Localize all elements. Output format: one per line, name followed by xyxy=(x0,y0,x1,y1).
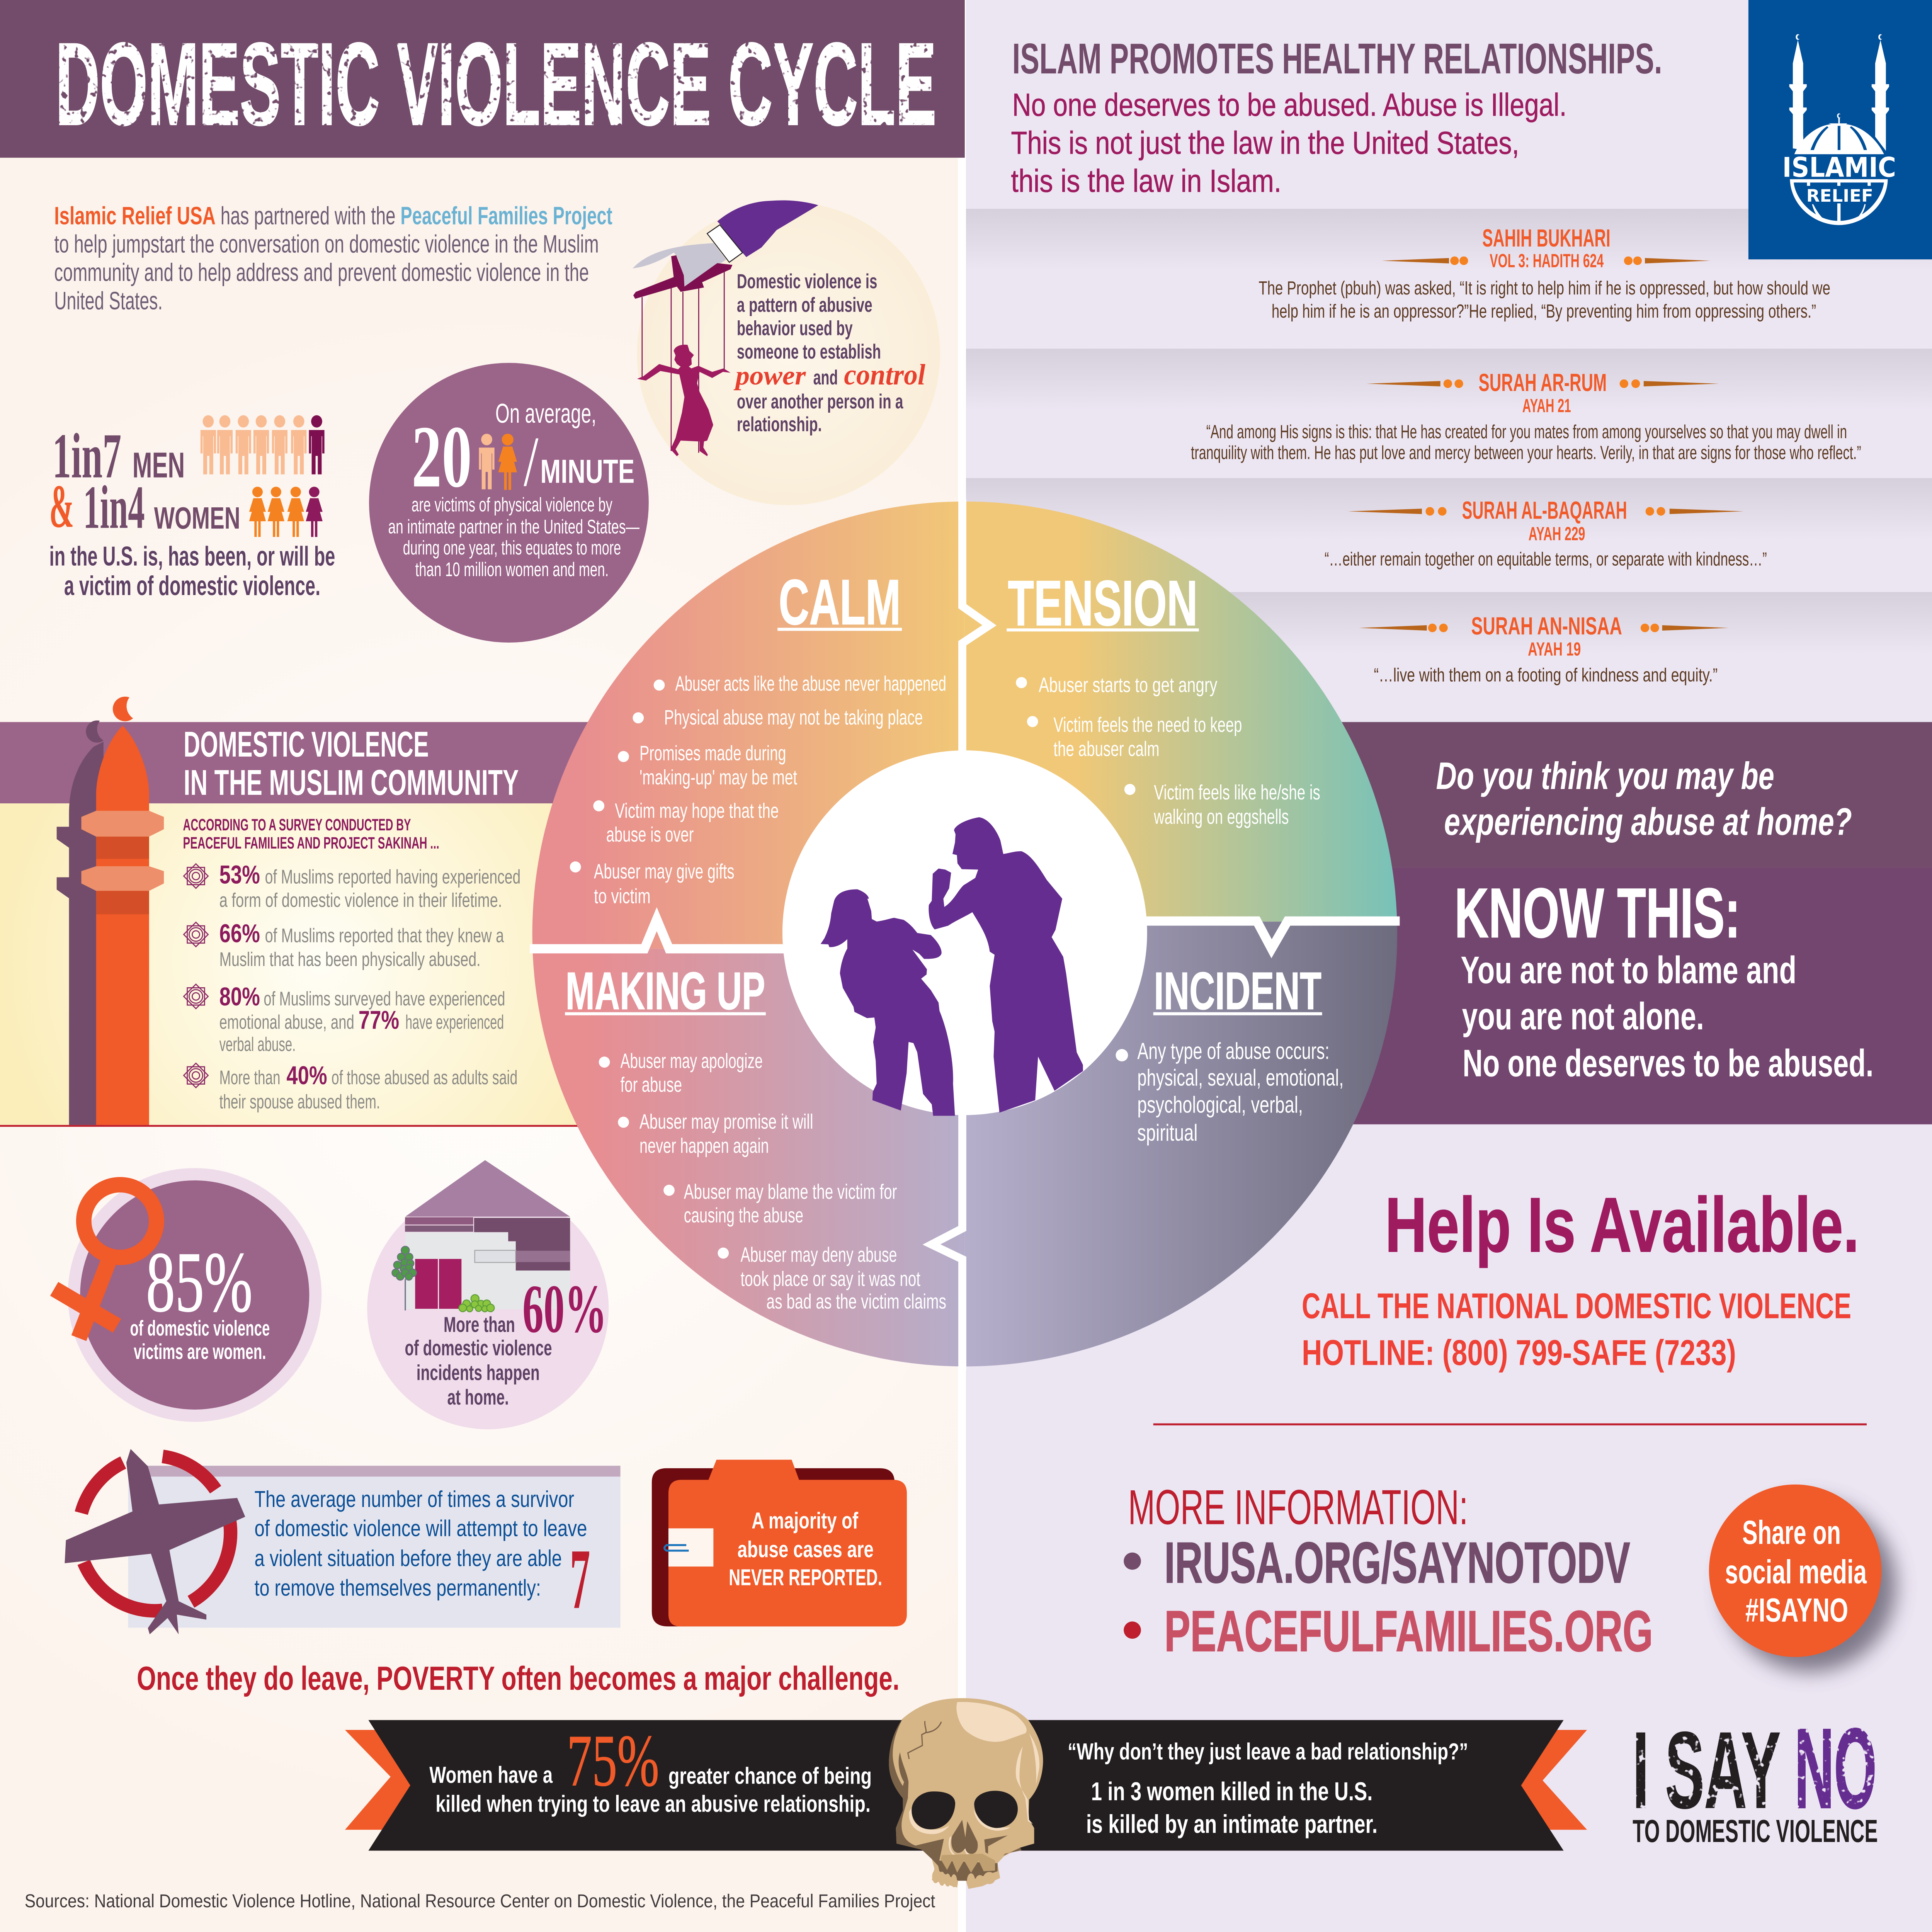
logo: Islamic Relief: ISLAMIC xyxy=(1782,151,1896,183)
segment: calm: Victim may hope that the xyxy=(615,799,779,823)
puppet definition text: control xyxy=(844,358,925,391)
know this heading: KNOW THIS: xyxy=(1454,873,1740,952)
statistic: 60 percent happen at home: 60% xyxy=(522,1270,607,1347)
text block: abuse is illegal: this is the law in Islam. xyxy=(1011,163,1281,199)
segment: incident: Any type of abuse occurs: xyxy=(1137,1037,1330,1064)
intro text block: Peaceful Families Project xyxy=(400,201,612,230)
statistic: 1 in 7 men and 1 in 4 women: & xyxy=(49,473,74,541)
question: Do you think you may be xyxy=(1436,755,1774,797)
survey note: ACCORDING TO A SURVEY CONDUCTED BY xyxy=(183,816,411,834)
callout: share on social media: Share on xyxy=(1742,1514,1841,1551)
survey statistics: a form of domestic violence in their lifetime. xyxy=(219,889,502,911)
title banner xyxy=(0,0,965,158)
panel: domestic violence in the Muslim community xyxy=(0,697,641,1127)
puppet definition text: and xyxy=(813,366,838,389)
icon: house xyxy=(392,1160,570,1312)
text block: abuse is illegal xyxy=(1011,87,1567,199)
survey statistics: of those abused as adults said xyxy=(332,1066,517,1088)
wheel dividers with arrows xyxy=(530,499,1400,1370)
puppet definition text xyxy=(734,270,925,436)
panel: average attempts to leave: of domestic violence will attempt to leave xyxy=(254,1515,587,1541)
segment: tension: Abuser starts to get angry xyxy=(1039,673,1218,697)
citation: Surah An-Nisaa: SURAH AN-NISAA xyxy=(1471,612,1622,640)
segment: incident: INCIDENT xyxy=(1154,962,1321,1021)
segment: calm: Abuser may give gifts xyxy=(594,860,735,883)
icon: folder with majority never reported xyxy=(652,1460,907,1626)
panel: puppet definition xyxy=(633,200,940,505)
statistic: 1 in 7 men and 1 in 4 women: WOMEN xyxy=(154,501,240,535)
statistic: 60 percent happen at home: incidents happen xyxy=(417,1360,540,1384)
intro text block: has partnered with the xyxy=(221,201,396,230)
icon: man and woman xyxy=(479,434,517,490)
segment: making up: Abuser may deny abuse xyxy=(740,1243,897,1266)
more information: PEACEFULFAMILIES.ORG xyxy=(1164,1599,1653,1663)
statistic circle: 20 per minute: 20 xyxy=(412,407,472,506)
logo: I say no to domestic violence: I SAY xyxy=(1633,1710,1781,1831)
icon: female symbol xyxy=(54,1185,156,1338)
icon: folder with majority never reported: abuse cases are xyxy=(737,1537,874,1562)
statistic circle: 20 per minute: On average, xyxy=(495,398,596,429)
segment: making up: causing the abuse xyxy=(684,1204,803,1227)
survey statistics: More than xyxy=(219,1066,280,1088)
icon: star bullets xyxy=(184,864,208,1088)
ornament xyxy=(1348,507,1743,516)
puppet definition text: behavior used by xyxy=(737,317,853,340)
survey statistics: verbal abuse. xyxy=(219,1033,296,1055)
statistic: 60 percent happen at home: More than xyxy=(444,1312,515,1337)
text block: abuse is illegal: No one deserves to be abused. Abuse is Illegal. xyxy=(1012,87,1567,123)
icon: skull xyxy=(889,1698,1043,1889)
logo: Islamic Relief: RELIEF xyxy=(1806,186,1873,206)
statistic circle: 20 per minute: / xyxy=(524,422,539,501)
citation: Surah Ar-Rum xyxy=(1191,369,1861,463)
citation: Surah Ar-Rum: SURAH AR-RUM xyxy=(1479,369,1607,396)
segment: making up: never happen again xyxy=(639,1134,769,1158)
citation: Surah An-Nisaa xyxy=(1359,612,1729,685)
callout: share on social media: #ISAYNO xyxy=(1745,1592,1848,1629)
segment: making up: Abuser may apologize xyxy=(621,1049,763,1073)
segment: tension xyxy=(965,502,1398,922)
segment: tension: Victim feels like he/she is xyxy=(1154,781,1320,804)
hotline text: HOTLINE: (800) 799-SAFE (7233) xyxy=(1302,1333,1736,1373)
ornament xyxy=(1382,257,1710,265)
segment: incident: psychological, verbal, xyxy=(1137,1091,1303,1117)
survey statistics: of Muslims surveyed have experienced xyxy=(264,988,505,1010)
callout: share on social media: social media xyxy=(1725,1554,1867,1591)
intro text block: United States. xyxy=(54,286,163,315)
more information: MORE INFORMATION: xyxy=(1128,1480,1468,1535)
citation: Surah An-Nisaa: “…live with them on a footing of kindness and equity.” xyxy=(1374,664,1718,685)
statistic: 85 percent of victims are women: victims are women. xyxy=(134,1339,266,1364)
ribbon: left: Women have a xyxy=(429,1762,553,1788)
icon: plane in target ring xyxy=(65,1449,245,1634)
icon: puppeteer hand and marionette xyxy=(633,200,818,456)
survey statistics: of Muslims reported that they knew a xyxy=(265,924,504,946)
segment: tension: TENSION xyxy=(1008,568,1197,639)
survey statistics: 40% xyxy=(286,1061,327,1090)
statistic: 1 in 7 men and 1 in 4 women xyxy=(49,415,335,601)
panel: average attempts to leave: The average number of times a survivor xyxy=(254,1486,574,1512)
panel: average attempts to leave xyxy=(65,1449,621,1634)
segment: making up xyxy=(532,949,965,1368)
icon: folder with majority never reported: NEVER REPORTED. xyxy=(729,1565,882,1590)
segment: calm: Promises made during xyxy=(639,742,786,765)
more information xyxy=(1124,1480,1653,1663)
sources: Sources: National Domestic Violence Hotline, National Resource Center on Domestic Violence, the Peaceful Families Project xyxy=(25,1891,935,1912)
intro text block: community and to help address and prevent domestic violence in the xyxy=(54,258,589,286)
segment: making up: MAKING UP xyxy=(566,962,765,1021)
segment: making up: for abuse xyxy=(621,1073,682,1096)
more information: IRUSA.ORG/SAYNOTODV xyxy=(1164,1530,1630,1595)
ribbon: right: 1 in 3 women killed in the U.S. xyxy=(1091,1777,1372,1806)
question xyxy=(1436,755,1852,843)
puppet definition text: relationship. xyxy=(737,413,822,436)
survey note xyxy=(183,816,439,852)
ribbon: right xyxy=(961,1720,1587,1851)
intro text block: Islamic Relief USA xyxy=(54,201,216,230)
survey statistics: have experienced xyxy=(405,1011,504,1033)
survey statistics: of Muslims reported having experienced xyxy=(265,866,520,888)
survey statistics: 80% xyxy=(219,982,260,1011)
segment: making up: took place or say it was not xyxy=(740,1267,920,1291)
hotline text xyxy=(1302,1286,1851,1373)
callout: poverty challenge: Once they do leave, POVERTY often becomes a major challenge. xyxy=(137,1660,900,1697)
statistic circle: 20 per minute: MINUTE xyxy=(540,453,634,490)
citation: Sahih Bukhari: VOL 3: HADITH 624 xyxy=(1490,250,1604,271)
survey statistics: their spouse abused them. xyxy=(219,1091,380,1113)
citation: Surah Al-Baqarah: AYAH 229 xyxy=(1529,523,1585,544)
background: right lavender side xyxy=(966,0,1932,1932)
chart: domestic violence cycle wheel xyxy=(530,499,1400,1370)
statistic: 1 in 7 men and 1 in 4 women: in the U.S. is, has been, or will be xyxy=(49,541,335,571)
citation: Surah Al-Baqarah: SURAH AL-BAQARAH xyxy=(1462,496,1627,524)
segment: calm: CALM xyxy=(779,566,901,638)
text block: abuse is illegal: This is not just the law in the United States, xyxy=(1011,125,1519,161)
reassurance text: you are not alone. xyxy=(1462,995,1704,1037)
icon row: men xyxy=(201,415,325,474)
survey note: PEACEFUL FAMILIES AND PROJECT SAKINAH ... xyxy=(183,834,439,852)
survey statistics: 53% xyxy=(219,860,260,889)
segment: tension: the abuser calm xyxy=(1053,737,1160,760)
silhouette: abuser and victim xyxy=(821,817,1083,1116)
survey statistics: 77% xyxy=(359,1006,399,1035)
statistic: 1 in 7 men and 1 in 4 women: MEN xyxy=(133,445,185,485)
statistic circle: 20 per minute: are victims of physical violence by xyxy=(412,493,612,515)
panel: average attempts to leave: to remove themselves permanently: xyxy=(254,1575,541,1600)
citation: Sahih Bukhari: SAHIH BUKHARI xyxy=(1482,224,1611,252)
citation: Sahih Bukhari xyxy=(1259,224,1830,322)
ribbon: left: greater chance of being xyxy=(668,1762,872,1789)
intro text block: to help jumpstart the conversation on domestic violence in the Muslim xyxy=(54,230,599,258)
icon row: women xyxy=(249,487,323,537)
survey statistics: Muslim that has been physically abused. xyxy=(219,948,481,970)
statistic: 1 in 7 men and 1 in 4 women: 1in4 xyxy=(83,473,145,541)
puppet definition text: a pattern of abusive xyxy=(737,294,872,316)
icon: folder with majority never reported: A majority of xyxy=(752,1508,858,1533)
statistic: 85 percent of victims are women: of domestic violence xyxy=(130,1316,270,1340)
segment: calm: Abuser acts like the abuse never happened xyxy=(675,672,946,695)
segment: incident: spiritual xyxy=(1137,1119,1197,1146)
decorative shaded bands xyxy=(966,209,1932,654)
statistic: 1 in 7 men and 1 in 4 women: a victim of domestic violence. xyxy=(64,570,320,601)
segment: calm xyxy=(532,502,965,949)
puppet definition text: power xyxy=(734,361,806,391)
icon: mosque and globe xyxy=(1789,34,1889,225)
segment: making up: Abuser may blame the victim for xyxy=(684,1180,897,1204)
statistic circle: 20 per minute: than 10 million women and men. xyxy=(415,558,609,580)
puppet definition text: Domestic violence is xyxy=(737,270,877,293)
citation: Surah Ar-Rum: AYAH 21 xyxy=(1522,395,1571,417)
segment: calm: abuse is over xyxy=(606,823,694,846)
segment: incident: physical, sexual, emotional, xyxy=(1137,1064,1344,1090)
panel: average attempts to leave: 7 xyxy=(570,1531,590,1627)
ornament xyxy=(1359,624,1729,632)
statistic: 60 percent happen at home xyxy=(367,1160,609,1429)
ribbon: left xyxy=(345,1720,973,1851)
heading: IN THE MUSLIM COMMUNITY xyxy=(184,762,519,803)
logo: Islamic Relief xyxy=(1748,0,1932,259)
panel: right purple know-this block xyxy=(1337,722,1932,1124)
segment: calm: 'making-up' may be met xyxy=(639,766,797,789)
title: DOMESTIC VIOLENCE CYCLE xyxy=(55,19,936,150)
callout: share on social media xyxy=(1709,1485,1896,1672)
wheel centre xyxy=(782,750,1147,1115)
background: centre white strip xyxy=(958,0,967,1932)
background: left cream side xyxy=(0,0,959,1932)
reassurance text: You are not to blame and xyxy=(1461,949,1796,992)
intro text block xyxy=(54,201,612,315)
survey statistics xyxy=(219,860,520,1113)
citation: Surah Al-Baqarah xyxy=(1325,496,1767,570)
citation: Surah An-Nisaa: AYAH 19 xyxy=(1528,638,1581,660)
segment: tension: walking on eggshells xyxy=(1154,805,1289,828)
panel: average attempts to leave: a violent situation before they are able xyxy=(254,1546,562,1571)
ribbon: left: 75% xyxy=(567,1720,659,1802)
segment: incident xyxy=(965,922,1398,1368)
statistic: 60 percent happen at home: of domestic violence xyxy=(405,1336,552,1360)
puppet definition text: over another person in a xyxy=(737,390,903,413)
survey statistics: 66% xyxy=(219,919,260,948)
survey statistics: emotional abuse, and xyxy=(219,1011,354,1033)
statistic: 85 percent of victims are women: 85% xyxy=(146,1235,253,1330)
statistic: 60 percent happen at home: at home. xyxy=(447,1385,509,1409)
icon: minarets xyxy=(57,697,164,1125)
statistic circle: 20 per minute xyxy=(369,363,649,643)
statistic: 85 percent of victims are women xyxy=(54,1168,321,1422)
heading: DOMESTIC VIOLENCE xyxy=(184,724,429,764)
segment: calm: to victim xyxy=(594,884,651,908)
ribbon: right: “Why don’t they just leave a bad relationship?” xyxy=(1068,1738,1468,1765)
statistic: 1 in 7 men and 1 in 4 women: 1in7 xyxy=(53,420,121,491)
ribbon: left: killed when trying to leave an abusive relationship. xyxy=(435,1791,871,1817)
statistic circle: 20 per minute: an intimate partner in the United States— xyxy=(388,516,640,538)
segment: calm: Physical abuse may not be taking place xyxy=(664,706,923,729)
reassurance text xyxy=(1461,949,1874,1084)
ornament xyxy=(1366,379,1719,388)
ribbon: right: is killed by an intimate partner. xyxy=(1086,1810,1378,1838)
segment: making up: Abuser may promise it will xyxy=(639,1110,813,1133)
heading xyxy=(184,724,519,803)
statistic circle: 20 per minute: during one year, this equates to more xyxy=(403,537,621,559)
segment: tension: Victim feels the need to keep xyxy=(1053,713,1242,736)
segment: making up: as bad as the victim claims xyxy=(766,1290,946,1313)
puppet definition text: someone to establish xyxy=(737,340,881,363)
